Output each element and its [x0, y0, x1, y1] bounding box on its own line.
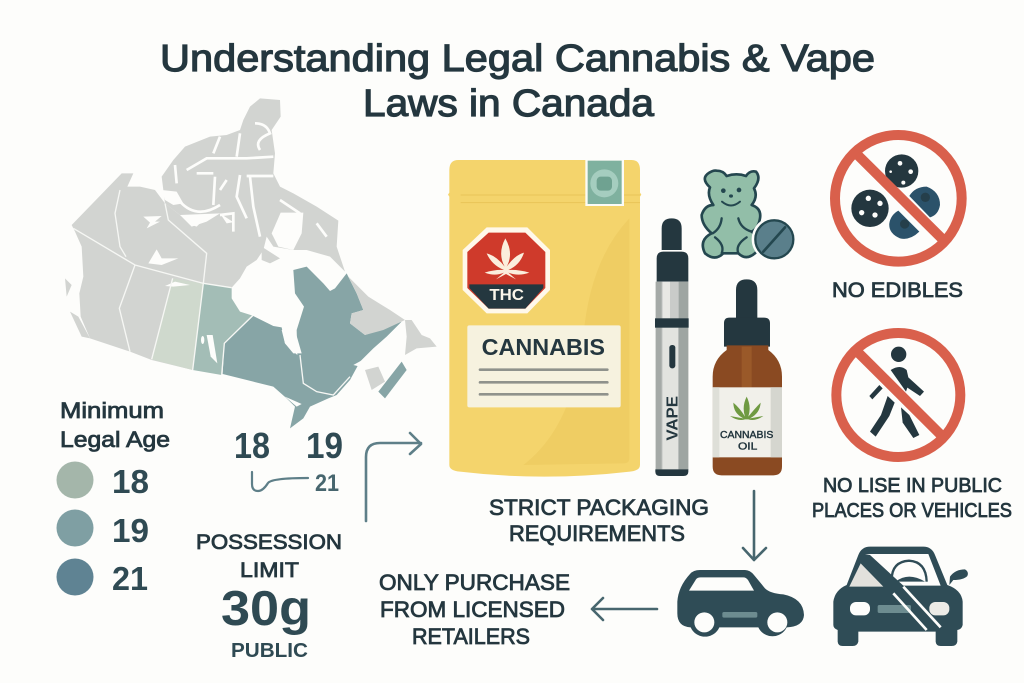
title — [160, 38, 875, 125]
arrow: to package — [366, 433, 421, 521]
gummy bear — [702, 171, 760, 257]
THC warning sign — [463, 227, 550, 313]
map: Ontario and Quebec — [223, 267, 402, 428]
cannabis package — [448, 160, 641, 477]
title: Understanding Legal Cannabis & Vape — [160, 38, 875, 80]
map: Atlantic and Pacific islands — [65, 247, 437, 390]
label: only purchase from licensed retailers: ONLY PURCHASE — [379, 570, 570, 595]
legend heading: Minimum — [60, 398, 164, 423]
legend row 19 — [56, 510, 149, 549]
cannabis oil bottle: OIL — [738, 441, 758, 452]
map: Labrador — [348, 277, 405, 335]
map: Saskatchewan — [152, 278, 203, 370]
label: only purchase from licensed retailers: FROM LICENSED — [380, 597, 565, 622]
prohibition ring — [836, 333, 960, 457]
package label — [467, 325, 621, 407]
pill — [752, 217, 797, 262]
map: Manitoba — [193, 283, 253, 375]
prohibition ring — [835, 135, 962, 262]
vape pen: VAPE — [664, 396, 681, 441]
package pouch — [448, 160, 641, 477]
age numbers with connector — [234, 425, 343, 497]
no edibles sign — [835, 135, 962, 262]
icon: side view car — [677, 570, 804, 637]
legend heading — [60, 398, 170, 452]
map of Canada — [65, 98, 437, 428]
age numbers with connector: 19 — [306, 425, 343, 466]
vape pen — [655, 218, 689, 476]
map: western and northern provinces — [72, 173, 263, 370]
age numbers with connector: 18 — [234, 425, 270, 466]
legend: minimum legal age — [56, 398, 170, 597]
legend row 18 — [56, 462, 149, 500]
THC warning sign: THC — [489, 287, 524, 304]
tamper stamp — [585, 160, 624, 206]
no public use sign — [836, 333, 960, 457]
label: strict packaging requirements — [489, 495, 709, 546]
legend row 19: 19 — [112, 512, 149, 549]
legend row 21: 21 — [112, 560, 148, 597]
label: strict packaging requirements: STRICT PACKAGING — [489, 495, 709, 520]
label: no edibles: NO EDIBLES — [832, 279, 963, 302]
label: only purchase from licensed retailers: RETAILERS — [412, 624, 530, 649]
possession limit — [196, 531, 342, 662]
label: no use in public places or vehicles — [812, 475, 1012, 522]
icon: edibles — [851, 154, 940, 239]
icon: no driving car — [833, 547, 968, 646]
map: lakes and provincial borders — [73, 190, 387, 407]
cannabis oil bottle — [713, 279, 782, 475]
possession limit: PUBLIC — [231, 640, 308, 662]
arrow: left to retailers — [592, 598, 657, 620]
icon: walking person — [869, 347, 924, 438]
possession limit: 30g — [221, 582, 311, 636]
title: Laws in Canada — [363, 83, 655, 125]
legend row 18: 18 — [112, 463, 149, 500]
label: no use in public places or vehicles: NO LISE IN PUBLIC — [823, 475, 1002, 497]
cannabis oil bottle: CANNABIS — [720, 430, 774, 441]
label: only purchase from licensed retailers — [379, 570, 570, 649]
legend heading: Legal Age — [60, 427, 170, 452]
map: Arctic archipelago — [162, 98, 345, 272]
map: Nova Scotia — [378, 362, 407, 398]
age numbers with connector: 21 — [315, 470, 339, 497]
label: strict packaging requirements: REQUIREMENTS — [509, 521, 685, 546]
package label: CANNABIS — [482, 334, 605, 360]
legend row 21 — [56, 558, 148, 597]
gummy bear and pill — [702, 171, 797, 262]
possession limit: POSSESSION — [196, 531, 342, 554]
arrow: down to car — [743, 491, 766, 560]
possession limit: LIMIT — [240, 559, 299, 582]
